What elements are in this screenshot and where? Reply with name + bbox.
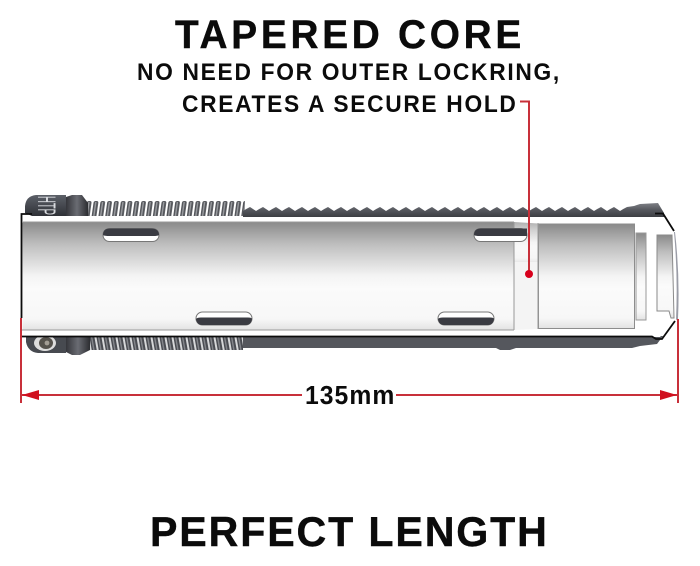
top knurled grip: [243, 203, 664, 217]
bottom knurled grip: [243, 336, 663, 350]
section dividers: [22, 222, 538, 330]
sleeve outline: [22, 214, 675, 339]
white sleeve: [22, 217, 675, 337]
handle grip illustration: [22, 195, 679, 355]
handle grip illustration: HTP: [32, 196, 60, 215]
inner ring: [636, 233, 646, 320]
subtitle: description: CREATES A SECURE HOLD: [182, 91, 516, 118]
heading: perfect length: PERFECT LENGTH: [150, 508, 547, 555]
slot: top right: [474, 228, 527, 242]
main core body: [22, 222, 514, 330]
subtitle: description: NO NEED FOR OUTER LOCKRING,: [137, 59, 559, 86]
dimension arrow: 135mm: 135mm: [305, 381, 394, 410]
callout leader line to tapered core: [520, 102, 533, 278]
subtitle: description: [137, 59, 559, 118]
right edge shading: [674, 232, 679, 320]
top ribbed section: [86, 201, 245, 216]
left end cap: [25, 195, 66, 216]
slot: bottom right: [438, 312, 494, 325]
bottom collar ring: [66, 336, 90, 355]
slot: bottom left: [196, 312, 252, 325]
tapered core section: [514, 222, 538, 330]
title: tapered core: TAPERED CORE: [175, 12, 521, 57]
slot: top left: [103, 228, 159, 242]
dimension arrow: 135mm: [21, 318, 678, 410]
core end section: [538, 224, 634, 328]
right socket: [657, 235, 674, 318]
bottom ribbed section: [88, 336, 243, 350]
top collar ring: [66, 195, 88, 216]
bottom left end cap with screw: [26, 335, 66, 353]
